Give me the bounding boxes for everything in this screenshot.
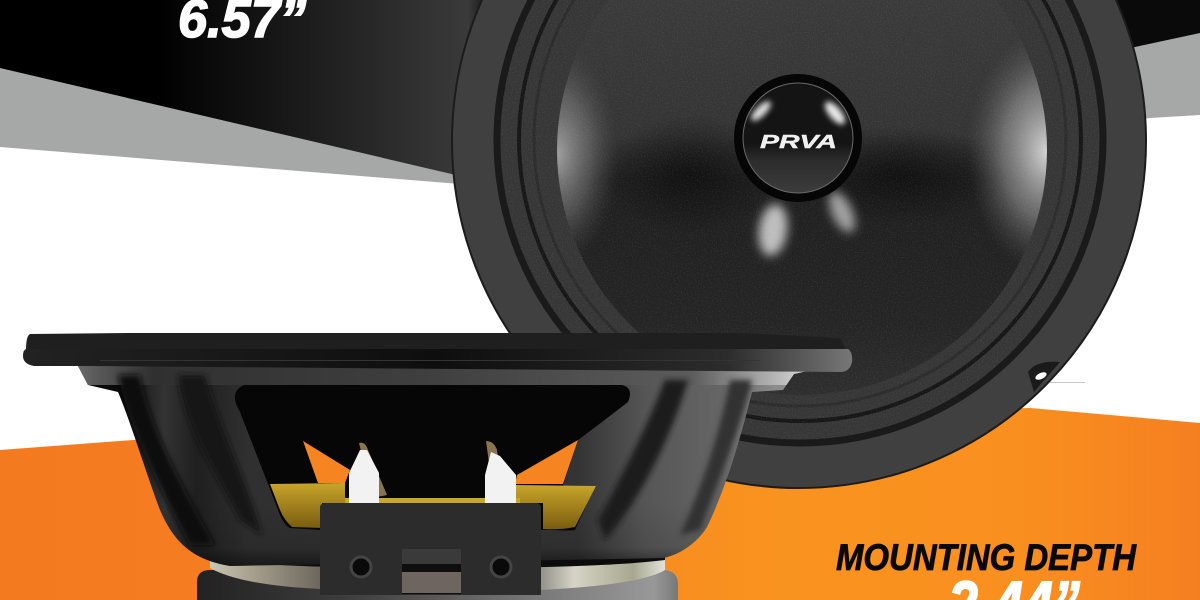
background: orange band: [0, 408, 1200, 600]
mounting depth label: MOUNTING DEPTH: [836, 537, 1137, 578]
left lead wire: [359, 443, 387, 498]
basket ribs: [78, 366, 838, 568]
right screw hole: [491, 557, 511, 577]
background: gray band: [0, 20, 1200, 184]
right rib two: [680, 380, 752, 535]
mounting notch: [1028, 362, 1060, 392]
thin guide line: [1050, 382, 1085, 383]
right cone highlight: [974, 50, 1047, 256]
left terminal tab: [349, 450, 379, 503]
notch upper part: [402, 549, 461, 564]
basket top band: [78, 366, 838, 385]
orange gap left: [303, 441, 350, 483]
right dark wedge: [850, 138, 962, 197]
speaker basket: [78, 366, 830, 566]
flange highlight: [100, 360, 760, 361]
brand logo: PRVA: [760, 132, 837, 152]
background: black header band: [0, 0, 1200, 176]
right specular under dust cap: [824, 188, 860, 236]
dust cap collar: [734, 74, 862, 202]
left cone highlight: [557, 66, 610, 246]
center notch: [402, 549, 461, 594]
right rib one: [598, 380, 688, 540]
dust cap body: [743, 83, 853, 193]
right terminal: [485, 441, 516, 503]
cap left glint: [748, 98, 774, 124]
basket bottom shade: [188, 542, 694, 566]
right terminal tab: [485, 452, 516, 503]
surround edge: [534, 0, 1066, 406]
right lead wire: [486, 441, 500, 470]
left terminal: [349, 443, 387, 503]
left specular under dust cap: [756, 202, 790, 258]
center spider strip: [345, 498, 520, 504]
notch metal: [402, 572, 461, 593]
left screw hole: [351, 557, 371, 577]
orange gap right: [515, 440, 578, 484]
right spider: [516, 485, 596, 529]
left rib two: [178, 375, 262, 535]
front view speaker: [452, 0, 1146, 488]
cap right glint: [821, 98, 849, 128]
metal ring: [210, 556, 665, 590]
ring shadow: [210, 556, 665, 568]
foam surround: [497, 0, 1103, 443]
speaker cone: [557, 47, 1047, 394]
side view speaker: [23, 333, 852, 600]
left rib one: [118, 375, 215, 545]
cone base shading: [560, 148, 1042, 394]
left dark wedge: [640, 130, 738, 202]
surround ridge: [519, 0, 1081, 421]
left spider: [270, 483, 345, 528]
rib group: [118, 375, 752, 545]
magnet base: [197, 570, 678, 600]
mounting hole: [1034, 371, 1048, 381]
speaker flange: [452, 0, 1146, 488]
basket window opening: [235, 385, 630, 530]
terminal block: [320, 503, 541, 595]
flange rim: [23, 349, 852, 372]
block body: [320, 503, 541, 595]
flange top gasket: [26, 333, 846, 350]
surface grain: [500, 0, 1100, 440]
dust cap: [734, 74, 862, 202]
